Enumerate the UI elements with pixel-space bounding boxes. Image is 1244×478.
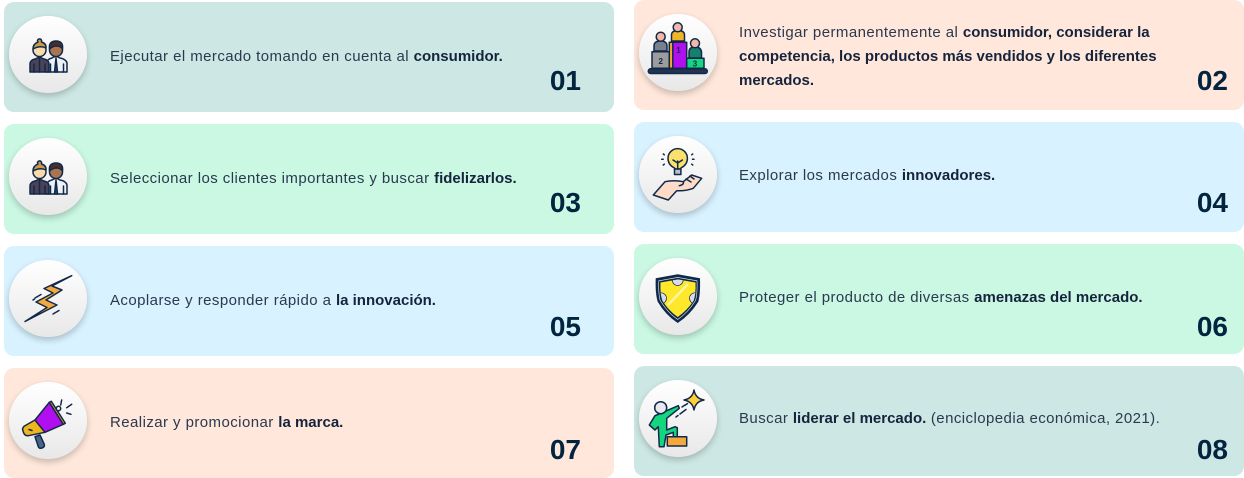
card 08: liderar el mercado [634, 366, 1244, 476]
text 07: Realizar y promocionar la marca. [110, 414, 343, 431]
number 03: 03 [550, 187, 581, 218]
icon: megaphone [9, 382, 87, 459]
card 07: promocionar la marca [4, 368, 614, 478]
text 04: Explorar los mercados innovadores. [739, 167, 995, 184]
text 05: Acoplarse y responder rápido a la innovación. [110, 292, 436, 309]
card 04: mercados innovadores [634, 122, 1244, 232]
number 05: 05 [550, 311, 581, 342]
text 02: mercados. [739, 72, 814, 89]
icon: shield [639, 258, 717, 335]
text 02: competencia, los productos más vendidos y los diferentes [739, 48, 1157, 65]
number 06: 06 [1197, 311, 1228, 342]
icon: podium: 1 [676, 46, 681, 55]
icon: two clients [9, 138, 87, 215]
text 02 [739, 24, 1157, 89]
text 06: Proteger el producto de diversas amenazas del mercado. [739, 289, 1143, 306]
icon: lightning bolt [9, 260, 87, 337]
card 05: acoplarse a la innovacion [4, 246, 614, 356]
number 01: 01 [550, 65, 581, 96]
number 04: 04 [1197, 187, 1228, 218]
text 03: Seleccionar los clientes importantes y buscar fidelizarlos. [110, 170, 517, 187]
number 08: 08 [1197, 434, 1228, 465]
icon: podium: 2 [658, 57, 663, 66]
card 01: ejecutar el mercado [4, 2, 614, 112]
icon: podium [639, 14, 717, 91]
text 01: Ejecutar el mercado tomando en cuenta al consumidor. [110, 48, 503, 65]
icon: light bulb over hand [639, 136, 717, 213]
card 03: seleccionar clientes [4, 124, 614, 234]
number 07: 07 [550, 434, 581, 465]
icon: leader reaching for a star [639, 380, 717, 457]
card 02: investigar al consumidor [634, 0, 1244, 110]
icon: two consumers [9, 16, 87, 93]
text 02: Investigar permanentemente al consumidor, considerar la [739, 24, 1150, 41]
card 06: proteger el producto [634, 244, 1244, 354]
number 02: 02 [1197, 65, 1228, 96]
icon: podium: 3 [693, 60, 698, 68]
text 08: Buscar liderar el mercado. (enciclopedia económica, 2021). [739, 410, 1160, 427]
